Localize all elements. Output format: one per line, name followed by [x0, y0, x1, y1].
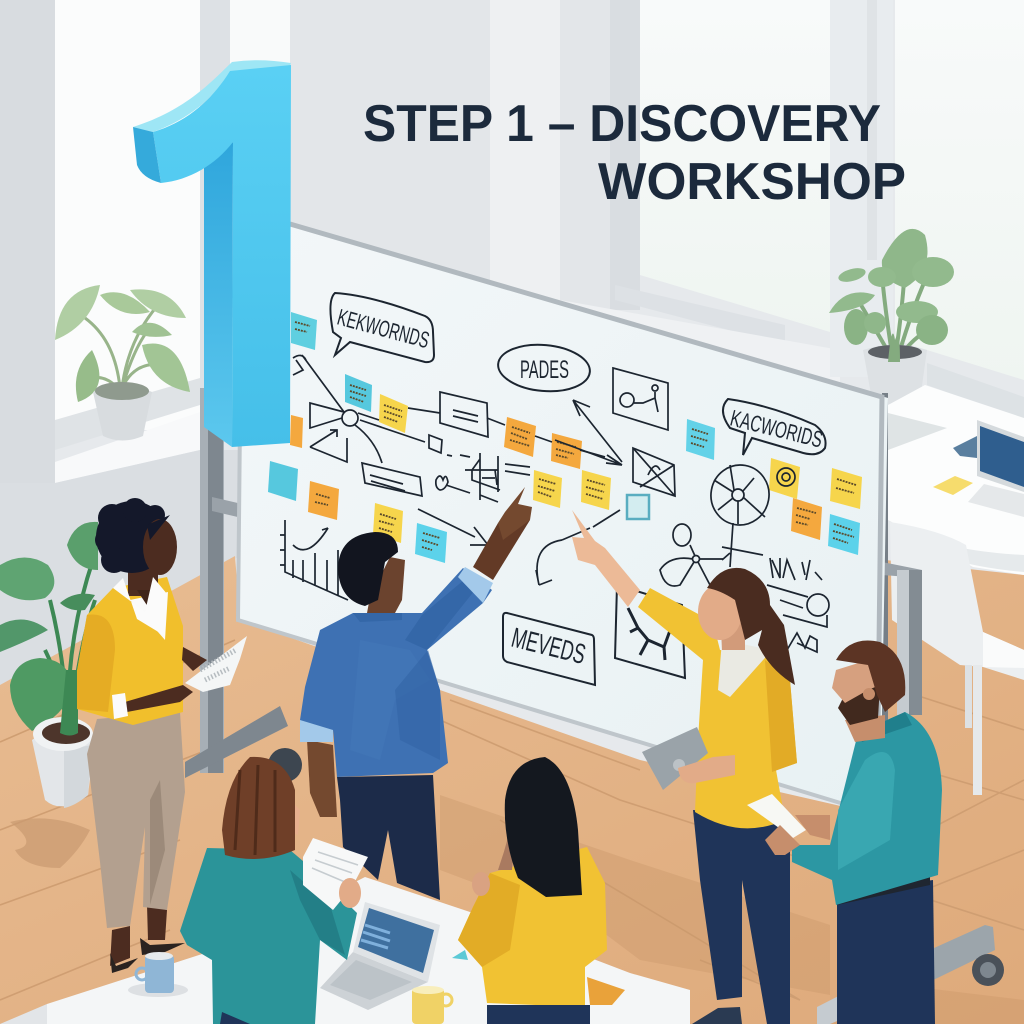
plant: window right — [829, 229, 954, 405]
whiteboard stand — [185, 388, 1004, 1024]
speech bubble: KEKWORNDS: KEKWORNDS — [335, 304, 432, 353]
desk with laptop: right — [888, 385, 1024, 575]
label: MEVEDS — [503, 613, 595, 685]
diagram sketches — [280, 355, 829, 678]
person: woman in yellow pointing — [572, 510, 797, 1024]
person: seated woman in teal — [180, 757, 368, 1024]
speech bubble: KACWORIDS: KACWORIDS — [728, 405, 825, 453]
person: seated woman in yellow — [452, 757, 625, 1024]
person: bearded man in teal — [747, 640, 942, 1024]
sticky notes — [268, 312, 862, 563]
laptop on front desk — [320, 902, 440, 1010]
speech bubble: KEKWORNDS — [330, 293, 434, 362]
label: PADES: PADES — [520, 356, 569, 384]
whiteboard — [238, 222, 888, 815]
title — [363, 95, 906, 211]
person: man in blue shirt pointing — [300, 487, 532, 900]
label: MEVEDS: MEVEDS — [509, 622, 589, 670]
chair: right — [890, 522, 1024, 795]
person: woman yellow sweater left — [77, 498, 247, 973]
speech bubble: KACWORIDS — [723, 399, 826, 455]
plant: floor left — [0, 522, 98, 808]
mug: blue — [128, 952, 188, 997]
title: STEP 1 – DISCOVERY — [363, 95, 881, 153]
label: PADES — [496, 341, 592, 395]
wood floor — [0, 556, 1024, 1024]
front desk — [0, 877, 690, 1024]
title: WORKSHOP — [598, 153, 906, 211]
plant: window left — [55, 285, 190, 440]
big numeral 1 — [133, 60, 291, 447]
mug: yellow — [412, 986, 452, 1024]
